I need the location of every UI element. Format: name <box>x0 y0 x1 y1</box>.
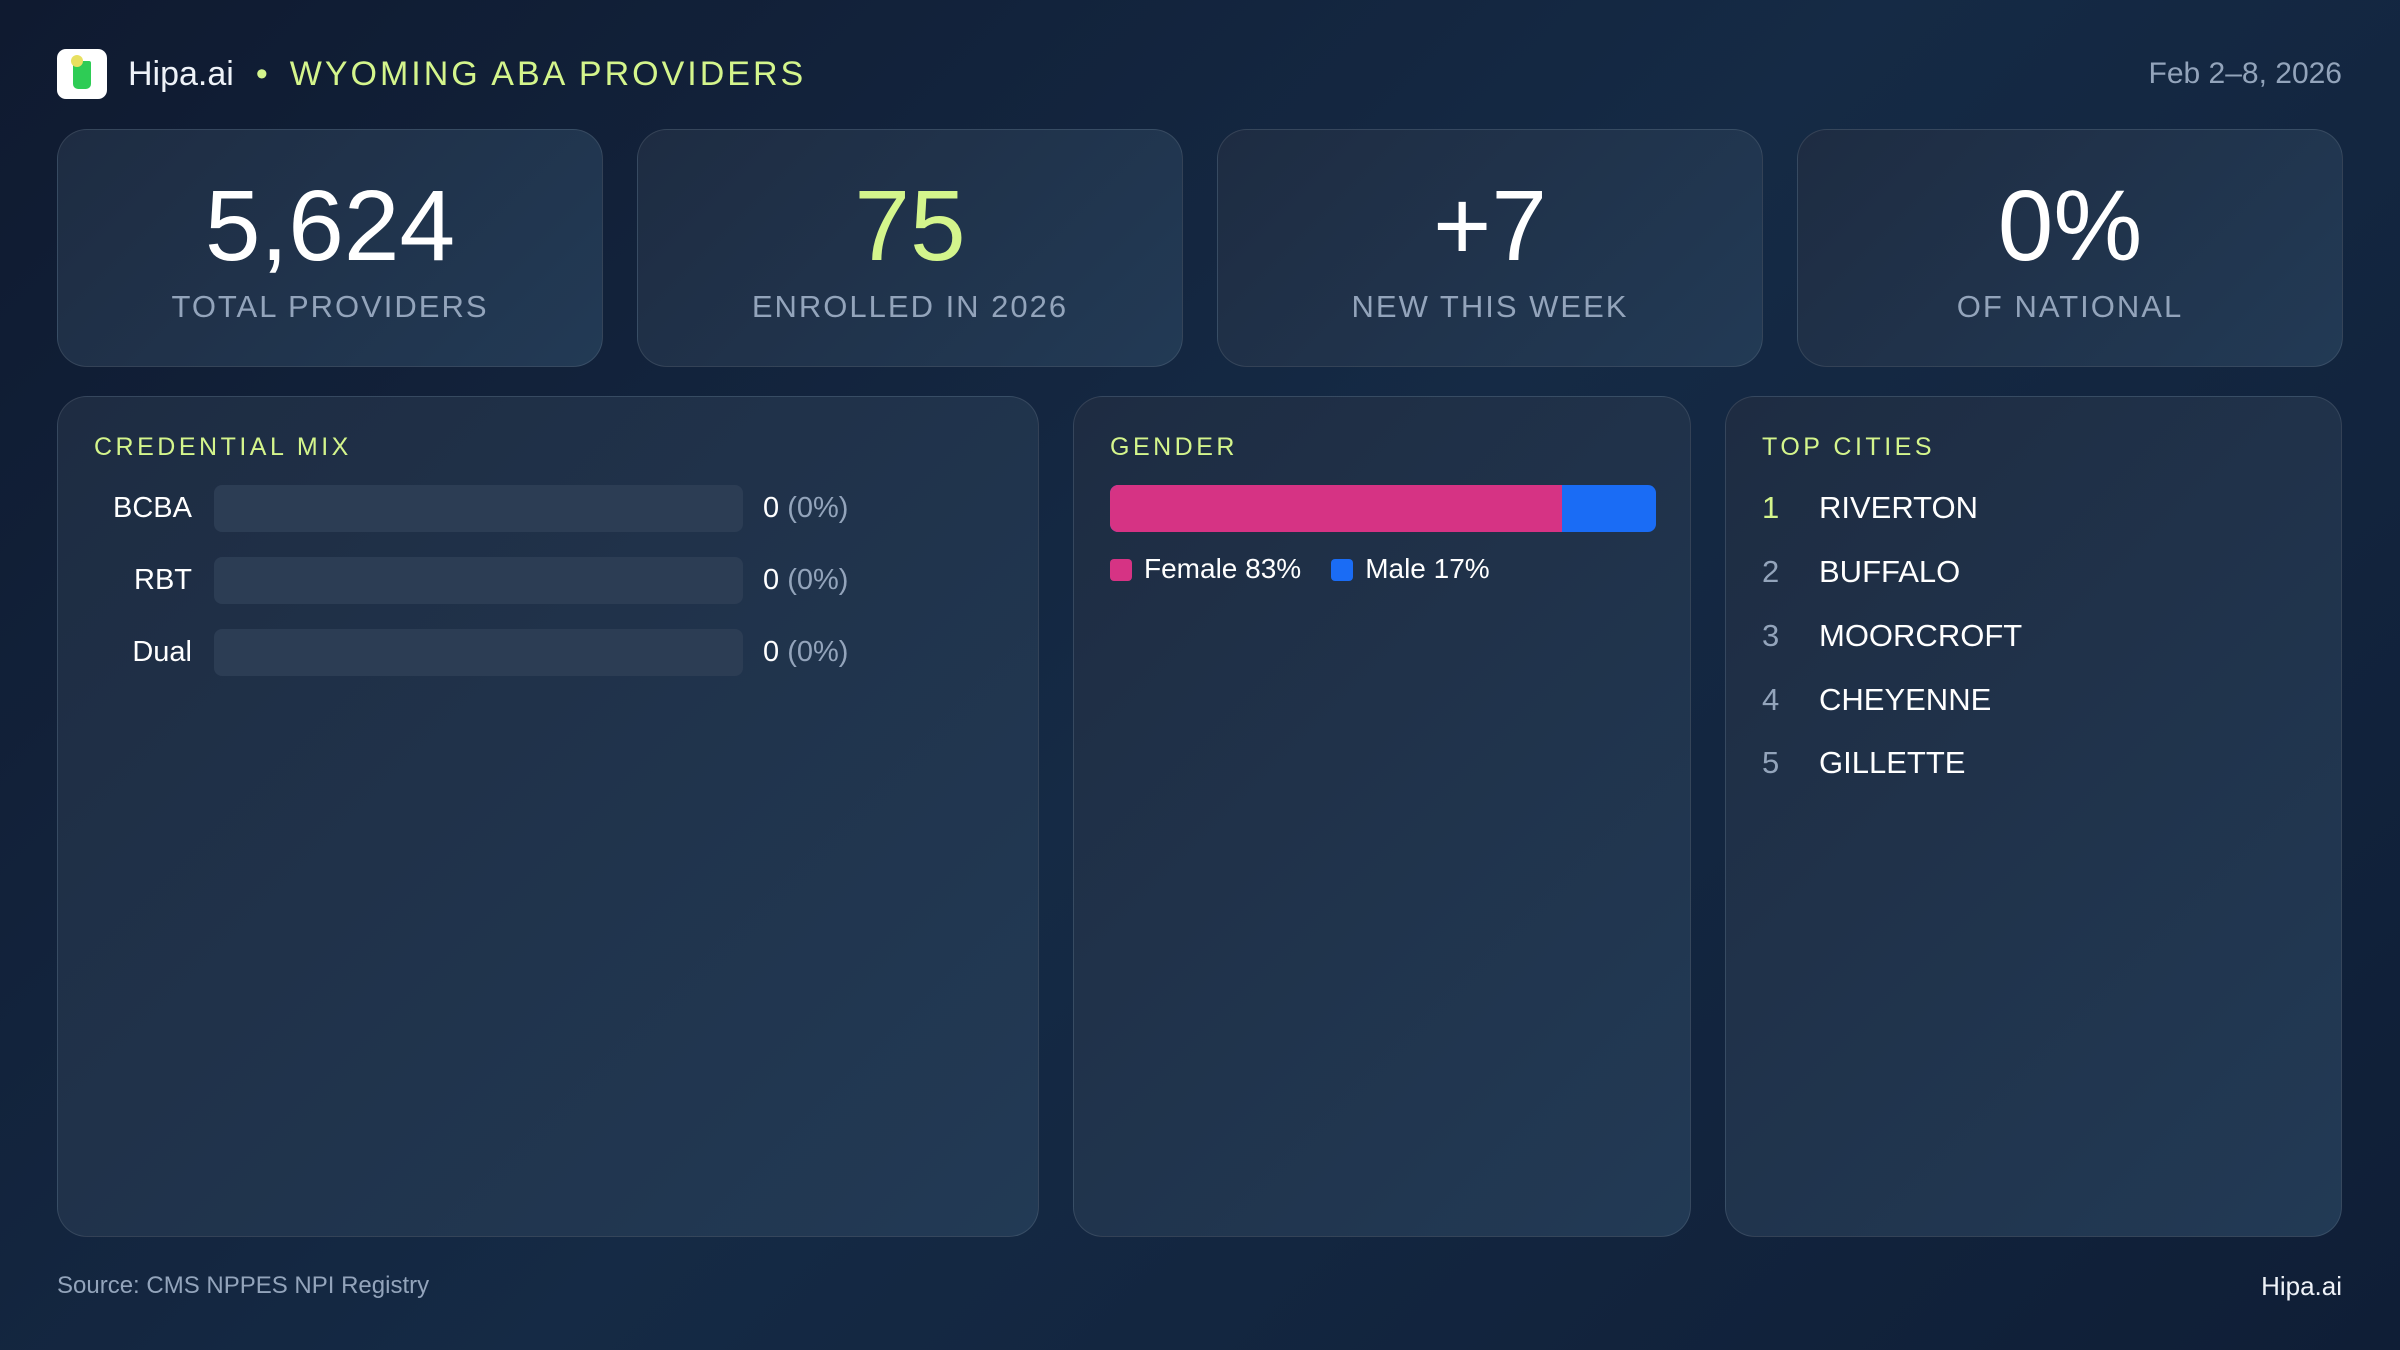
row: BCBA: BCBA <box>113 492 192 524</box>
icon: logo <box>57 49 107 99</box>
kpi: new this week: +7 <box>1433 170 1547 282</box>
kpi: new this week <box>1217 129 1763 367</box>
city list: 2 <box>1762 554 1779 589</box>
city list: MOORCROFT <box>1819 618 2022 653</box>
city list <box>1762 490 2022 780</box>
footer source: Source: CMS NPPES NPI Registry <box>57 1272 429 1299</box>
row: RBT <box>134 557 848 604</box>
kpi: national: OF NATIONAL <box>1957 289 2183 324</box>
kpi: enrolled <box>637 129 1183 367</box>
city list: CHEYENNE <box>1819 682 1991 717</box>
kpi: national <box>1797 129 2343 367</box>
panel: credential mix <box>57 396 1039 1237</box>
city list: GILLETTE <box>1819 745 1965 780</box>
footer brand: Hipa.ai <box>2261 1271 2342 1301</box>
legend: Female 83% Male 17% <box>1144 553 1490 584</box>
kpi: new this week: NEW THIS WEEK <box>1352 289 1628 324</box>
city list: 3 <box>1762 618 1779 653</box>
city list: RIVERTON <box>1819 490 1978 525</box>
city list: 5 <box>1762 745 1779 780</box>
panel: top cities <box>1725 396 2342 1237</box>
kpi: total providers: 5,624 <box>205 170 455 282</box>
row: BCBA: 0 (0%) <box>763 492 848 524</box>
kpi: enrolled: 75 <box>854 170 966 282</box>
row: Dual <box>132 629 848 676</box>
date: Feb 2–8, 2026 <box>2148 57 2342 90</box>
row: Dual: 0 (0%) <box>763 636 848 668</box>
gender bar <box>1110 485 1656 532</box>
kpi: national: 0% <box>1998 170 2142 282</box>
panel: gender <box>1073 396 1691 1237</box>
city list: BUFFALO <box>1819 554 1960 589</box>
kpi: total providers <box>57 129 603 367</box>
kpi: enrolled: ENROLLED IN 2026 <box>752 289 1068 324</box>
city list: 4 <box>1762 682 1779 717</box>
heading: credential mix: CREDENTIAL MIX <box>94 433 352 461</box>
heading: gender: GENDER <box>1110 433 1238 461</box>
heading: top cities: TOP CITIES <box>1762 433 1935 461</box>
brand title: Hipa.ai • WYOMING ABA PROVIDERS <box>128 55 806 93</box>
row: RBT: RBT <box>134 564 192 596</box>
row: Dual: Dual <box>132 636 192 668</box>
row: RBT: 0 (0%) <box>763 564 848 596</box>
city list: 1 <box>1762 490 1779 525</box>
kpi: total providers: TOTAL PROVIDERS <box>171 289 489 324</box>
header <box>57 49 806 99</box>
row: BCBA <box>113 485 848 532</box>
